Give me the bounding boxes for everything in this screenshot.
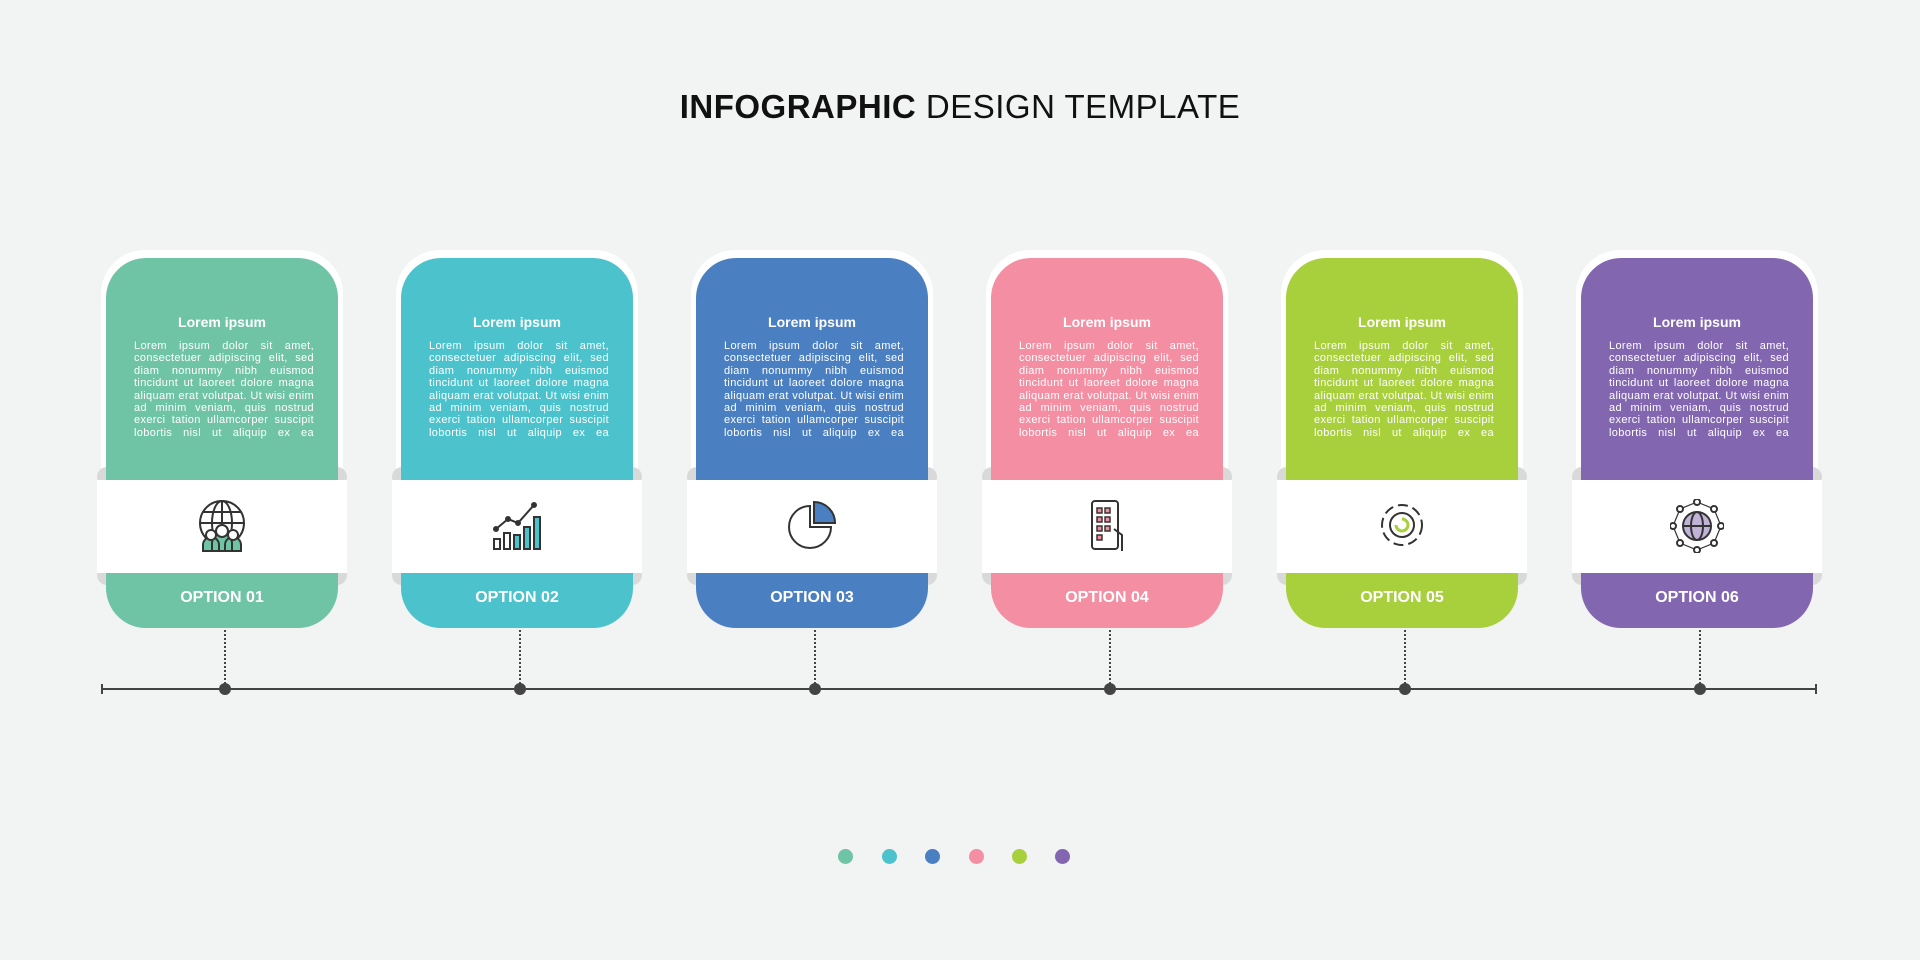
panel: option 04	[982, 250, 1232, 628]
label: OPTION 04	[1065, 589, 1149, 606]
icon: gear cycle	[1277, 480, 1527, 573]
title: INFOGRAPHIC DESIGN TEMPLATE	[680, 88, 1240, 125]
heading: Lorem ipsum	[1358, 314, 1446, 330]
label: OPTION 06	[1655, 589, 1739, 606]
label: OPTION 03	[770, 589, 854, 606]
heading: Lorem ipsum	[473, 314, 561, 330]
text block: Lorem ipsum dolor sit amet, consectetuer adipiscing elit, sed diam nonummy nibh euismod tincidunt ut laoreet dolore magna aliquam erat volutpat. Ut wisi enim ad minim veniam, quis nostrud exerci tation ullamcorper suscipit lobortis nisl ut aliquip ex ea	[1314, 340, 1494, 439]
legend dots	[838, 849, 1070, 864]
heading: Lorem ipsum	[1063, 314, 1151, 330]
icon: globe people	[97, 480, 347, 573]
panel: option 06	[1572, 250, 1822, 628]
panel: option 05	[1277, 250, 1527, 628]
heading: Lorem ipsum	[768, 314, 856, 330]
text block: Lorem ipsum dolor sit amet, consectetuer adipiscing elit, sed diam nonummy nibh euismod tincidunt ut laoreet dolore magna aliquam erat volutpat. Ut wisi enim ad minim veniam, quis nostrud exerci tation ullamcorper suscipit lobortis nisl ut aliquip ex ea	[1609, 340, 1789, 439]
text block: Lorem ipsum dolor sit amet, consectetuer adipiscing elit, sed diam nonummy nibh euismod tincidunt ut laoreet dolore magna aliquam erat volutpat. Ut wisi enim ad minim veniam, quis nostrud exerci tation ullamcorper suscipit lobortis nisl ut aliquip ex ea	[724, 340, 904, 439]
heading: Lorem ipsum	[178, 314, 266, 330]
icon: pie chart	[687, 480, 937, 573]
panel: option 01	[97, 250, 347, 628]
text block: Lorem ipsum dolor sit amet, consectetuer adipiscing elit, sed diam nonummy nibh euismod tincidunt ut laoreet dolore magna aliquam erat volutpat. Ut wisi enim ad minim veniam, quis nostrud exerci tation ullamcorper suscipit lobortis nisl ut aliquip ex ea	[429, 340, 609, 439]
icon: bar chart	[392, 480, 642, 573]
icon: network globe	[1572, 480, 1822, 573]
panel: option 02	[392, 250, 642, 628]
heading: Lorem ipsum	[1653, 314, 1741, 330]
label: OPTION 05	[1360, 589, 1444, 606]
label: OPTION 02	[475, 589, 559, 606]
text block: Lorem ipsum dolor sit amet, consectetuer adipiscing elit, sed diam nonummy nibh euismod tincidunt ut laoreet dolore magna aliquam erat volutpat. Ut wisi enim ad minim veniam, quis nostrud exerci tation ullamcorper suscipit lobortis nisl ut aliquip ex ea	[1019, 340, 1199, 439]
label: OPTION 01	[180, 589, 264, 606]
icon: phone hand	[982, 480, 1232, 573]
panel: option 03	[687, 250, 937, 628]
text block: Lorem ipsum dolor sit amet, consectetuer adipiscing elit, sed diam nonummy nibh euismod tincidunt ut laoreet dolore magna aliquam erat volutpat. Ut wisi enim ad minim veniam, quis nostrud exerci tation ullamcorper suscipit lobortis nisl ut aliquip ex ea	[134, 340, 314, 439]
